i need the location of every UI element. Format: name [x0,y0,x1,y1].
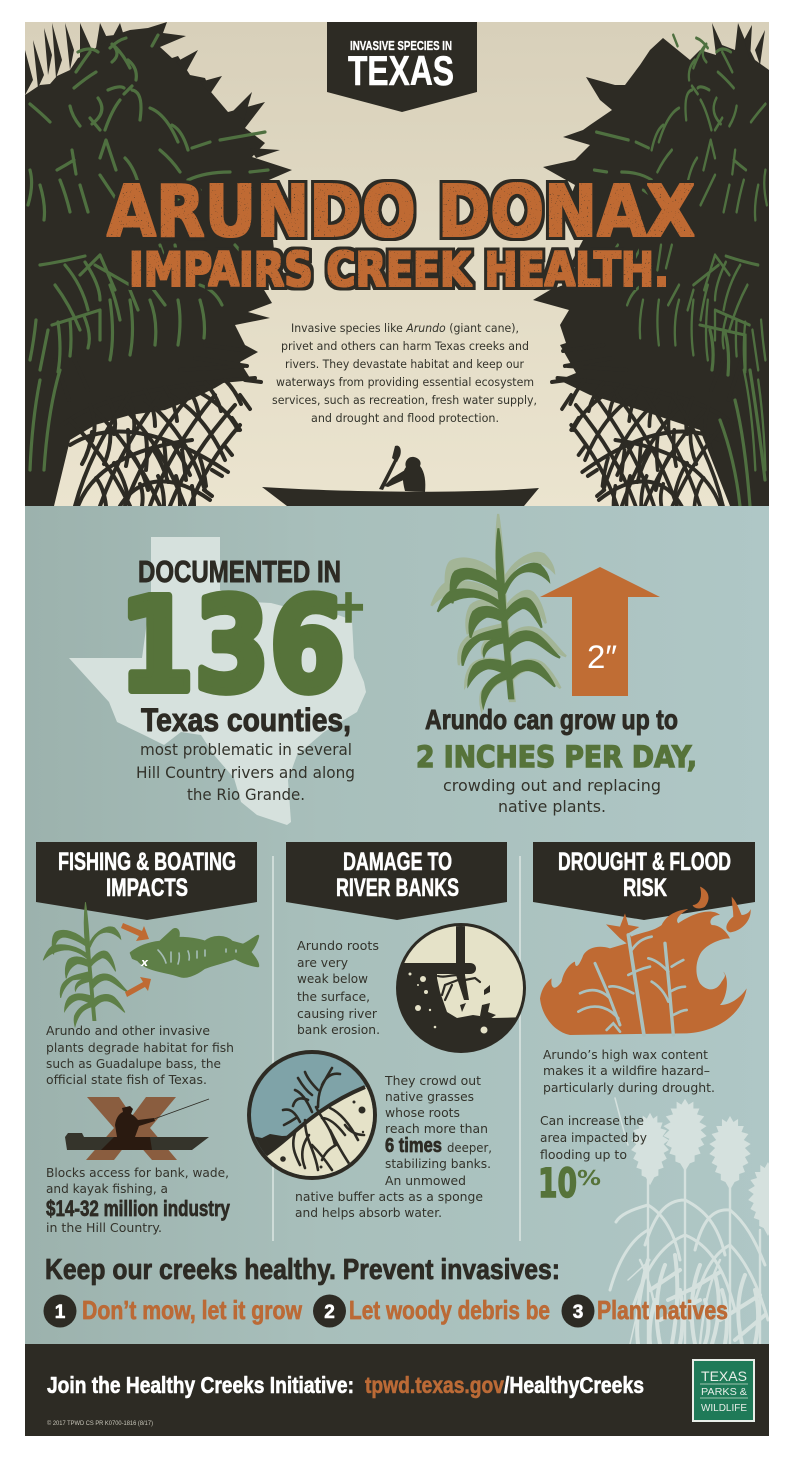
intro text: privet and others can harm Texas creeks and [281,339,529,353]
logo: Texas Parks and Wildlife [693,1360,754,1421]
logo: Texas Parks and Wildlife: PARKS & [701,1387,747,1398]
text: habitat degrade [46,1023,234,1087]
heading banner: damage to river banks: RIVER BANKS [336,874,459,902]
action 2: 2 [324,1302,335,1323]
text: wildfire hazard: makes it a wildfire hazard– [543,1063,710,1078]
text: weak roots: bank erosion. [297,1022,380,1037]
list: three prevention actions [44,1294,728,1328]
text: habitat degrade: such as Guadalupe bass, the [46,1056,221,1071]
action 3: Plant natives [597,1295,728,1325]
icon: arundo plant with ghost growth [431,514,566,710]
intro text: rivers. They devastate habitat and keep our [285,357,524,371]
palm: left giant cane silhouette [25,22,292,506]
panel: drought and flood risk [533,842,755,1207]
heading banner: drought and flood [533,842,755,920]
panel: hero header [25,22,769,506]
text: crowd out native grasses: whose roots [385,1105,460,1120]
stat: growth rate text [416,704,697,816]
text: flooding impact [538,1113,648,1207]
text: crowd out native grasses: 6 times [385,1135,442,1157]
action 2 [313,1294,550,1328]
copyright: © 2017 TPWD CS PR K0700-1816 (8/17) [47,1420,153,1427]
arrow: two inch growth: 2″ [587,639,617,675]
text: flooding impact: % [577,1166,601,1190]
action 3 [562,1294,728,1328]
stat: documented in 136+ counties: 136 [119,571,345,721]
text: blocks access [46,1165,231,1235]
banner: invasive species in Texas: INVASIVE SPECIES IN [350,38,452,53]
text: habitat degrade: official state fish of Texas. [46,1072,207,1087]
title [107,170,695,298]
text: wildfire hazard: particularly during drought. [543,1080,715,1095]
text: crowd out native grasses: reach more than [385,1121,488,1136]
banner: invasive species in Texas: TEXAS [348,47,454,94]
text: crowd out native grasses: They crowd out [384,1073,481,1088]
icon: native grass roots circle [247,1050,385,1185]
panel: fishing and boating impacts [36,842,258,1235]
text: crowd out native grasses: and helps absorb water. [295,1205,442,1220]
text: habitat degrade: Arundo and other invasive [46,1023,210,1038]
action 3: 3 [573,1302,583,1323]
intro text: and drought and flood protection. [311,411,499,425]
stat: growth rate text: 2 INCHES PER DAY, [416,740,697,774]
intro text: waterways from providing essential ecosystem [276,375,534,389]
text: wildfire hazard: Arundo’s high wax content [543,1047,708,1062]
logo: Texas Parks and Wildlife: TEXAS [701,1368,747,1384]
text: weak roots [297,938,380,1037]
action 1: Don’t mow, let it grow [82,1295,303,1325]
text: weak roots: are very [297,955,349,970]
icon: Guadalupe bass: x [140,956,149,969]
icon: small arundo plant [43,902,128,1026]
stat: documented in 136+ counties: most problematic in several [140,740,352,759]
icon: Guadalupe bass [131,929,258,977]
text: crowd out native grasses: native buffer acts as a sponge [295,1189,483,1204]
title: ARUNDO DONAX [107,170,695,253]
text: habitat degrade: plants degrade habitat for fish [46,1040,234,1055]
text: weak roots: causing river [297,1006,378,1021]
text: crowd out native grasses: An unmowed [385,1173,466,1188]
heading banner: fishing and boating [36,842,257,920]
text: flooding impact: area impacted by [540,1130,648,1145]
stat: growth rate text: native plants. [498,797,606,816]
stat: growth rate text: crowding out and replacing [443,776,661,795]
icon: eroding bank roots circle [396,923,530,1053]
text: weak roots: weak below [297,971,368,986]
call to action: tpwd.texas.gov [365,1372,504,1398]
stat: documented in 136+ counties [119,554,367,804]
intro text: Invasive species like Arundo (giant cane), [291,321,519,335]
heading banner: fishing and boating: IMPACTS [106,874,188,902]
call to action [47,1372,644,1398]
stat: documented in 136+ counties: Hill Country rivers and along [136,763,355,782]
heading banner: damage to river banks [286,842,507,920]
hero sky background [25,22,769,506]
call to action: Join the Healthy Creeks Initiative: [47,1372,354,1398]
text: blocks access: Blocks access for bank, wade, [46,1165,229,1180]
arrows toward fish [121,923,151,997]
map: Texas state outline [69,537,366,825]
text: blocks access: $14-32 million industry [46,1196,231,1221]
text: crowd out native grasses: deeper, [447,1140,492,1155]
logo: Texas Parks and Wildlife: WILDLIFE [701,1403,747,1414]
heading: keep our creeks healthy: Keep our creeks healthy. Prevent invasives: [45,1254,560,1286]
text: flooding impact: Can increase the [540,1113,644,1128]
action 2: Let woody debris be [349,1295,550,1325]
intro text: services, such as recreation, fresh water supply, [272,393,537,407]
stat: documented in 136+ counties: Texas counties, [141,702,351,738]
text: flooding impact: 10 [538,1161,577,1207]
heading banner: fishing and boating: FISHING & BOATING [58,848,236,876]
arrow: two inch growth [540,567,660,696]
intro text [272,321,537,425]
stat: growth rate text: Arundo can grow up to [425,704,678,735]
text: wildfire hazard [543,1047,715,1095]
text: flooding impact: flooding up to [540,1147,627,1162]
title: IMPAIRS CREEK HEALTH. [129,243,669,298]
text: crowd out native grasses: native grasses [385,1089,474,1104]
text: weak roots: Arundo roots [297,938,379,953]
text: crowd out native grasses: stabilizing banks. [385,1156,491,1171]
heading banner: drought and flood: RISK [623,874,667,902]
action 1 [44,1294,303,1328]
panel: teal body background [25,506,769,1344]
icon: kayaker silhouette [262,446,539,506]
call to action: /HealthyCreeks [504,1372,644,1398]
text: blocks access: in the Hill Country. [46,1220,162,1235]
panel: damage to river banks [247,842,530,1220]
banner: invasive species in Texas [327,22,477,112]
action 1: 1 [55,1302,66,1323]
text: blocks access: and kayak fishing, a [46,1181,168,1196]
illustration: pale pampas grass [610,1098,788,1344]
heading banner: damage to river banks: DAMAGE TO [343,848,452,876]
text: weak roots: the surface, [297,989,370,1004]
palm: right giant cane silhouette [533,23,769,506]
text: crowd out native grasses [295,1073,492,1220]
stat: documented in 136+ counties: DOCUMENTED IN [138,554,341,589]
column dividers [273,856,520,1241]
stat: documented in 136+ counties: + [330,579,367,633]
stat: documented in 136+ counties: the Rio Grande. [187,785,305,804]
icon: burning arundo flames [540,887,751,1035]
footer bar [25,1344,769,1436]
icon: crossed out kayak fisherman [65,1097,209,1160]
